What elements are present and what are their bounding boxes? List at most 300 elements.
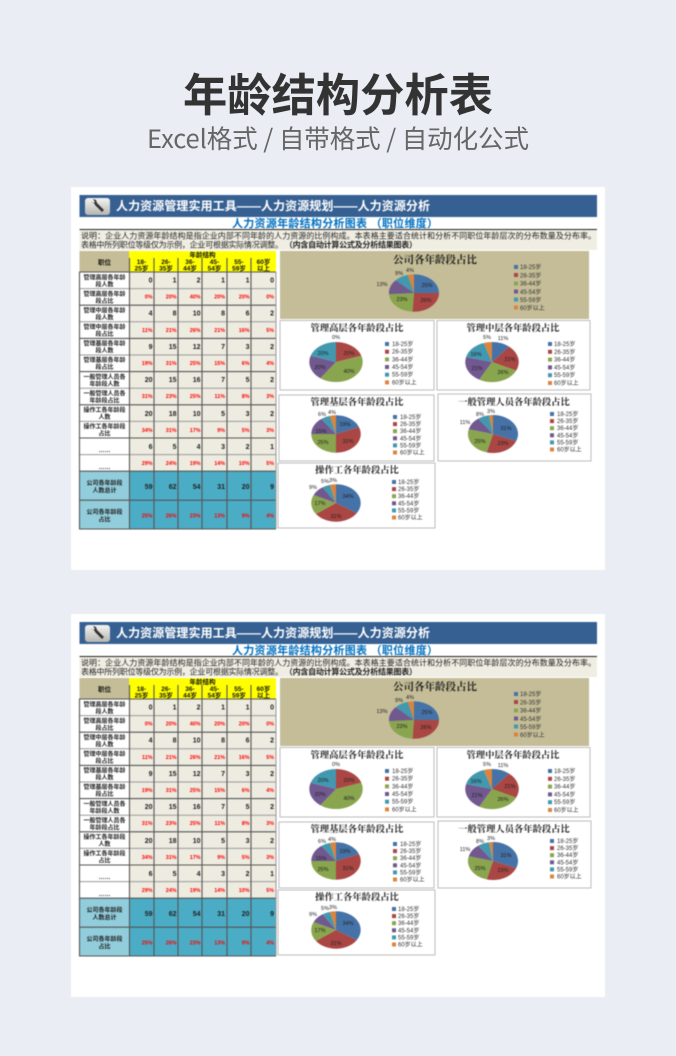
chart: operators pie: 60岁以上 — [398, 940, 423, 948]
table: age structure: 44岁 — [183, 690, 197, 700]
chart: company pie: 45-54岁 — [520, 715, 541, 723]
chart: base management pie: 31% — [342, 439, 354, 445]
table: age structure: 62 — [169, 484, 177, 491]
table: age structure: 一般管理人员各 — [83, 373, 126, 381]
table: age structure: 2 — [246, 871, 250, 878]
chart: general management staff pie: 8% — [476, 412, 484, 418]
chart: base management pie: 60岁以上 — [400, 448, 425, 456]
table: age structure: 7 — [221, 804, 225, 811]
chart: senior management pie — [280, 748, 434, 817]
chart: senior management pie: 36-44岁 — [392, 355, 413, 363]
description note: 表格中所列职位等级仅为示例，企业可根据实际情况调整。 （内含自动计算公式及分析结果图表） — [81, 666, 417, 676]
chart: operators pie: 55-59岁 — [398, 506, 419, 514]
table: age structure: 0 — [270, 278, 274, 284]
table: age structure: 31% — [142, 394, 153, 400]
chart: operators pie: 36-44岁 — [398, 919, 419, 927]
chart: senior management pie: 45-54岁 — [392, 363, 413, 371]
chart: operators pie: 5% — [321, 479, 329, 485]
chart: general management staff pie: 3% — [487, 836, 495, 842]
chart: company pie: 4% — [406, 268, 414, 274]
table: age structure: 15% — [214, 788, 225, 794]
chart: operators pie: 31% — [330, 941, 342, 947]
table: age structure: 管理中层各年龄 — [83, 734, 126, 742]
table: age structure: 13% — [214, 940, 225, 946]
table: age structure: 31% — [142, 821, 153, 827]
chart: middle management pie: 11% — [498, 763, 508, 769]
table: age structure: 10 — [193, 738, 201, 744]
chart: general management staff pie: 25% — [474, 439, 486, 445]
table: age structure: 1 — [173, 278, 177, 284]
table: age structure: 15 — [169, 771, 177, 778]
chart: company pie: 45-54岁 — [520, 288, 541, 296]
table: age structure: 5% — [242, 428, 250, 434]
table: age structure: 5% — [242, 855, 250, 861]
chart: senior management pie: 26-35岁 — [392, 348, 413, 356]
chart: company pie: 60岁以上 — [520, 304, 545, 312]
table: age structure: 54岁 — [208, 264, 221, 272]
chart: company pie: 23% — [396, 724, 408, 730]
table: age structure: 23% — [190, 514, 201, 520]
table: age structure: 管理高层各年龄 — [83, 274, 126, 282]
table: age structure: 18- — [137, 259, 146, 266]
table: age structure: 段人数 — [95, 280, 114, 288]
table: age structure: 4% — [266, 788, 274, 794]
chart: company pie: 25% — [421, 710, 433, 716]
chart: middle management pie: 26% — [497, 797, 509, 803]
chart: base management pie: 4% — [328, 837, 336, 843]
chart: operators pie: 26-35岁 — [398, 485, 419, 493]
table: age structure: 11% — [142, 328, 153, 334]
chart: company pie — [280, 251, 589, 319]
chart: operators pie: 26-35岁 — [398, 912, 419, 920]
table: age structure: 管理中层各年龄 — [83, 750, 126, 758]
table: age structure: 9 — [149, 344, 153, 351]
table: age structure: 段人数 — [95, 314, 114, 322]
table: age structure: 占比 — [98, 856, 111, 864]
table: age structure: 操作工各年龄段 — [83, 833, 126, 841]
chart: middle management pie: 21% — [504, 784, 516, 790]
table: age structure: 一般管理人员各 — [83, 816, 126, 824]
chart: senior management pie: 0% — [332, 762, 340, 768]
table: age structure: 15 — [169, 344, 177, 351]
chart: general management staff pie: 36-44岁 — [557, 851, 578, 859]
table: age structure: 5 — [246, 804, 250, 811]
chart: senior management pie: 20% — [343, 778, 355, 784]
table: age structure: …… — [98, 875, 110, 881]
chart: middle management pie: 5% — [483, 335, 491, 341]
chart: operators pie: 9% — [309, 485, 317, 491]
chart: company pie: 36-44岁 — [520, 280, 541, 288]
chart: company pie: 55-59岁 — [520, 723, 541, 731]
table: age structure: 3% — [266, 821, 274, 827]
table: age structure: 34% — [142, 428, 153, 434]
chart: senior management pie: 26-35岁 — [392, 775, 413, 783]
table: age structure: 2 — [270, 771, 274, 778]
chart: operators pie: 操作工各年龄段占比 — [315, 891, 400, 903]
chart: base management pie: 6% — [318, 412, 326, 418]
table: age structure: 18- — [137, 686, 146, 693]
table: age structure: 段占比 — [95, 363, 114, 371]
table: age structure: 公司各年龄段 — [86, 508, 123, 516]
chart: general management staff pie: 55-59岁 — [557, 865, 578, 873]
chart: senior management pie: 20% — [317, 778, 329, 784]
table: age structure: 3 — [246, 771, 250, 778]
table: age structure: 31% — [166, 361, 177, 367]
chart: operators pie: 操作工各年龄段占比 — [315, 464, 400, 476]
chart: general management staff pie: 23% — [497, 868, 509, 874]
chart: operators pie: 60岁以上 — [398, 514, 423, 522]
table: age structure: 25岁 — [135, 264, 148, 272]
header bar: 人力资源管理实用工具——人力资源规划——人力资源分析 — [116, 625, 430, 640]
chart: base management pie: 19% — [339, 849, 351, 855]
table: age structure: 4% — [266, 514, 274, 520]
chart: general management staff pie: 31% — [500, 853, 512, 859]
table: age structure: 管理高层各年龄 — [83, 717, 126, 725]
table: age structure: 23% — [166, 821, 177, 827]
table: age structure: 13% — [214, 514, 225, 520]
table: age structure: 24% — [166, 461, 177, 467]
table: age structure: 3 — [221, 871, 225, 878]
table: age structure: 5 — [173, 871, 177, 878]
chart: general management staff pie: 11% — [460, 420, 470, 426]
table: age structure: 6% — [242, 788, 250, 794]
chart: senior management pie: 20% — [314, 792, 326, 798]
chart: base management pie: 管理基层各年龄段占比 — [311, 396, 404, 408]
table: age structure: 5% — [266, 328, 274, 334]
table: age structure: 0% — [145, 294, 153, 300]
chart: operators pie: 17% — [314, 928, 326, 934]
table: age structure: 20 — [145, 377, 153, 384]
table: age structure: 14% — [214, 461, 225, 467]
table: age structure: 25% — [190, 394, 201, 400]
table: age structure: 10% — [239, 461, 250, 467]
table: age structure: 20 — [145, 804, 153, 811]
table: age structure: 9% — [242, 514, 250, 520]
chart: general management staff pie: 一般管理人员各年龄段占比 — [458, 823, 570, 835]
chart: senior management pie: 36-44岁 — [392, 782, 413, 790]
table: age structure: 40% — [190, 294, 201, 300]
table: age structure: 25% — [190, 821, 201, 827]
table: age structure: 20% — [214, 722, 225, 728]
table: age structure: 19% — [190, 461, 201, 467]
table: age structure: 15 — [169, 377, 177, 384]
table: age structure: 一般管理人员各 — [83, 800, 126, 808]
chart: general management staff pie — [438, 821, 591, 888]
table: age structure: 年龄结构 — [190, 677, 216, 686]
table: age structure: 5% — [266, 755, 274, 761]
table: age structure: 20% — [166, 294, 177, 300]
table: age structure: 2 — [270, 377, 274, 384]
table: age structure: 段占比 — [95, 724, 114, 732]
table: age structure: 1 — [246, 278, 250, 284]
table: age structure: 20% — [239, 294, 250, 300]
chart: base management pie: 45-54岁 — [400, 861, 421, 869]
chart: general management staff pie: 8% — [476, 839, 484, 845]
table: age structure: 36- — [185, 259, 195, 266]
table: age structure: 55- — [234, 259, 244, 266]
chart: base management pie — [279, 822, 434, 888]
chart: middle management pie: 26-35岁 — [554, 348, 575, 356]
table: age structure: 9% — [217, 855, 225, 861]
table: age structure: 31 — [217, 911, 225, 918]
chart: senior management pie: 20% — [314, 365, 326, 371]
table: age structure: 2 — [270, 411, 274, 418]
table: age structure: 人数 — [98, 840, 111, 848]
chart: middle management pie: 11% — [498, 336, 508, 342]
table: age structure: 4 — [197, 871, 201, 878]
table: age structure: 29% — [142, 888, 153, 894]
table: age structure: 29% — [142, 461, 153, 467]
chart: senior management pie: 60岁以上 — [392, 378, 417, 386]
description note: 表格中所列职位等级仅为示例，企业可根据实际情况调整。 （内含自动计算公式及分析结果图表） — [81, 240, 417, 250]
table: age structure: 9% — [242, 940, 250, 946]
table: age structure: 3% — [266, 855, 274, 861]
table: age structure: 26% — [190, 328, 201, 334]
table: age structure: 5 — [221, 838, 225, 845]
table: age structure: 9% — [217, 428, 225, 434]
table: age structure: 31% — [166, 855, 177, 861]
chart: company pie: 9% — [395, 698, 403, 704]
chart: general management staff pie: 31% — [500, 426, 512, 432]
chart: company pie: 26% — [420, 298, 432, 304]
chart: company pie — [280, 678, 589, 746]
chart: senior management pie: 20% — [317, 351, 329, 357]
chart: company pie: 13% — [376, 282, 388, 288]
chart: operators pie: 34% — [342, 494, 354, 500]
table: age structure: 4 — [197, 444, 201, 451]
table: age structure: 25% — [190, 361, 201, 367]
table: age structure: 0% — [266, 294, 274, 300]
table: age structure: 1 — [270, 871, 274, 878]
table: age structure: 8% — [242, 821, 250, 827]
header bar — [80, 622, 597, 644]
table: age structure: 1 — [270, 444, 274, 451]
table: age structure: 12 — [193, 344, 201, 351]
table: age structure: 31% — [166, 428, 177, 434]
chart: operators pie: 45-54岁 — [398, 926, 419, 934]
table: age structure: 21% — [214, 328, 225, 334]
chart: company pie: 公司各年龄段占比 — [393, 253, 477, 266]
table: age structure: 45- — [210, 686, 219, 693]
table: age structure: 54岁 — [208, 690, 221, 700]
chart: operators pie: 31% — [330, 514, 342, 520]
chart: middle management pie: 45-54岁 — [554, 790, 575, 798]
chart: company pie: 36-44岁 — [520, 707, 541, 715]
table: age structure: 10 — [193, 838, 201, 845]
table: age structure: 2 — [270, 310, 274, 318]
table: age structure: 管理中层各年龄 — [83, 323, 126, 331]
chart: middle management pie: 60岁以上 — [554, 806, 579, 814]
table: age structure: 55- — [234, 686, 244, 693]
chart: company pie: 55-59岁 — [520, 296, 541, 304]
table: age structure: 10 — [193, 411, 201, 418]
table: age structure: 20% — [166, 722, 177, 728]
chart: operators pie — [278, 890, 435, 955]
table: age structure: 5% — [266, 461, 274, 467]
table: age structure: 1 — [221, 704, 225, 712]
table: age structure: 年龄段人数 — [89, 380, 120, 388]
table: age structure: 7 — [221, 344, 225, 351]
chart: senior management pie: 40% — [343, 369, 355, 375]
panel: spreadsheet preview 2 — [71, 614, 605, 997]
chart: general management staff pie: 25% — [474, 866, 486, 872]
chart: general management staff pie: 26-35岁 — [557, 844, 578, 852]
table: age structure: 8 — [173, 738, 177, 744]
table: age structure: 占比 — [98, 516, 111, 524]
sheet heading: 人力资源年龄结构分析图表 （职位维度） — [232, 216, 438, 230]
chart: base management pie: 36-44岁 — [400, 854, 421, 862]
table: age structure: 以上 — [257, 264, 270, 272]
table: age structure: 6 — [149, 444, 153, 451]
chart: general management staff pie: 60岁以上 — [557, 872, 582, 880]
chart: middle management pie: 21% — [471, 793, 483, 799]
table: age structure: 19% — [142, 788, 153, 794]
table: age structure: 21% — [166, 328, 177, 334]
chart: company pie: 26-35岁 — [520, 698, 541, 706]
chart: base management pie: 55-59岁 — [400, 868, 421, 876]
table: age structure: 40% — [190, 722, 201, 728]
table: age structure: 3% — [266, 428, 274, 434]
table: age structure: 0% — [266, 722, 274, 728]
table: age structure: 人数总计 — [92, 486, 117, 494]
table: age structure: 15% — [214, 361, 225, 367]
table: age structure: 1 — [173, 704, 177, 712]
table: age structure: 公司各年龄段 — [86, 935, 123, 943]
chart: middle management pie — [437, 320, 590, 390]
chart: general management staff pie: 26-35岁 — [557, 417, 578, 425]
table: age structure: 5 — [246, 377, 250, 384]
table: age structure: 24% — [166, 888, 177, 894]
table: age structure: …… — [98, 448, 110, 454]
table: age structure: 4 — [149, 310, 153, 318]
table: age structure: 5 — [173, 444, 177, 451]
table: age structure: 3 — [246, 838, 250, 845]
chart: base management pie: 26-35岁 — [400, 847, 421, 855]
table: age structure: 7 — [221, 377, 225, 384]
chart: middle management pie: 36-44岁 — [554, 356, 575, 364]
chart: senior management pie: 20% — [343, 351, 355, 357]
chart: operators pie — [278, 463, 435, 528]
table: age structure: 公司各年龄段 — [86, 906, 123, 914]
table: age structure: 管理高层各年龄 — [83, 290, 126, 298]
chart: base management pie: 45-54岁 — [400, 434, 421, 442]
chart: senior management pie: 55-59岁 — [392, 798, 413, 806]
table: age structure: 0 — [149, 278, 153, 284]
table: age structure: …… — [98, 892, 110, 898]
table: age structure: 6% — [242, 361, 250, 367]
chart: company pie: 13% — [376, 709, 388, 715]
table: age structure: …… — [98, 465, 110, 471]
chart: middle management pie: 管理中层各年龄段占比 — [467, 322, 560, 334]
chart: company pie: 26% — [420, 725, 432, 731]
header bar — [80, 195, 597, 217]
chart: general management staff pie: 3% — [487, 409, 495, 415]
table: age structure: 16% — [239, 755, 250, 761]
table: age structure: 6 — [149, 871, 153, 878]
chart: operators pie: 18-25岁 — [398, 905, 419, 913]
table: age structure: 31% — [166, 788, 177, 794]
header bar: 人力资源管理实用工具——人力资源规划——人力资源分析 — [116, 198, 430, 213]
table: age structure: 段人数 — [95, 774, 114, 782]
table: age structure: 20 — [242, 911, 250, 918]
table: age structure: 管理基层各年龄 — [83, 783, 126, 791]
chart: base management pie: 4% — [328, 410, 336, 416]
table: age structure: 26- — [161, 686, 171, 693]
table: age structure: 8 — [221, 738, 225, 744]
chart: middle management pie: 管理中层各年龄段占比 — [467, 749, 560, 761]
table: age structure: 年龄段人数 — [89, 807, 120, 815]
table: age structure: 管理高层各年龄 — [83, 700, 126, 708]
chart: general management staff pie: 11% — [460, 847, 470, 853]
table: age structure: 34% — [142, 855, 153, 861]
table: age structure: 21% — [166, 755, 177, 761]
chart: company pie: 18-25岁 — [520, 690, 541, 698]
chart: general management staff pie: 55-59岁 — [557, 438, 578, 446]
table: age structure: 16 — [193, 377, 201, 384]
table: age structure: 59 — [145, 911, 153, 918]
chart: company pie: 18-25岁 — [520, 263, 541, 271]
table: age structure: 25% — [190, 788, 201, 794]
chart: middle management pie: 18-25岁 — [554, 340, 575, 348]
chart: company pie: 23% — [396, 297, 408, 303]
chart: senior management pie — [280, 320, 434, 390]
chart: base management pie: 15% — [315, 856, 327, 862]
chart: middle management pie: 16% — [470, 779, 482, 785]
chart: senior management pie: 60岁以上 — [392, 805, 417, 813]
chart: middle management pie: 18-25岁 — [554, 767, 575, 775]
chart: company pie: 25% — [421, 283, 433, 289]
chart: base management pie: 18-25岁 — [400, 413, 421, 421]
table: age structure: 26% — [166, 514, 177, 520]
table: age structure: 3 — [221, 444, 225, 451]
table: age structure — [79, 677, 276, 956]
table: age structure: 操作工各年龄段 — [83, 850, 126, 858]
chart: middle management pie: 21% — [471, 366, 483, 372]
table: age structure: 操作工各年龄段 — [83, 422, 126, 430]
table: age structure: 0% — [145, 722, 153, 728]
chart: senior management pie: 45-54岁 — [392, 790, 413, 798]
table: age structure: 59 — [145, 484, 153, 491]
chart: company pie: 60岁以上 — [520, 731, 545, 739]
table: age structure: 段占比 — [95, 297, 114, 305]
table: age structure: 0 — [149, 704, 153, 712]
chart: middle management pie: 45-54岁 — [554, 363, 575, 371]
table: age structure: 26% — [190, 755, 201, 761]
chart: base management pie: 36-44岁 — [400, 427, 421, 435]
table: age structure: 8 — [221, 310, 225, 318]
table: age structure: 11% — [142, 755, 153, 761]
table: age structure: 段人数 — [95, 708, 114, 716]
table: age structure: 段人数 — [95, 346, 114, 354]
table: age structure: 20% — [214, 294, 225, 300]
chart: operators pie: 18-25岁 — [398, 478, 419, 486]
table: age structure: 20 — [145, 411, 153, 418]
chart: general management staff pie: 一般管理人员各年龄段占比 — [458, 396, 570, 408]
table: age structure: 职位 — [98, 684, 112, 694]
table: age structure: 6 — [246, 738, 250, 744]
table: age structure: 段人数 — [95, 740, 114, 748]
chart: operators pie: 5% — [321, 906, 329, 912]
chart: senior management pie: 18-25岁 — [392, 340, 413, 348]
table: age structure: 25岁 — [135, 690, 148, 700]
title: 年龄结构分析表 — [183, 70, 493, 121]
table: age structure: 年龄结构 — [190, 250, 216, 259]
chart: middle management pie: 16% — [470, 352, 482, 358]
chart: general management staff pie: 45-54岁 — [557, 431, 578, 439]
table: age structure: 16 — [193, 804, 201, 811]
description note — [80, 229, 597, 250]
table: age structure: 23% — [166, 394, 177, 400]
